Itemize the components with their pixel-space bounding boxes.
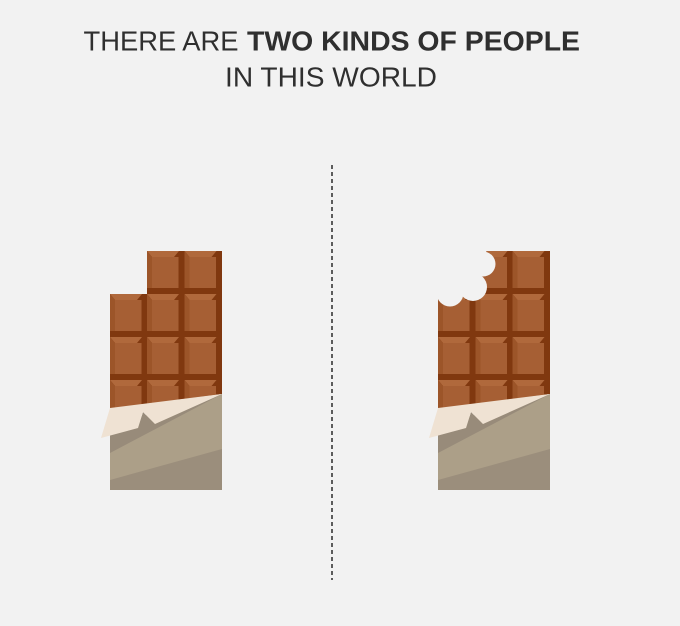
wrapper xyxy=(101,394,222,490)
bite mark xyxy=(430,245,496,306)
right chocolate bar: bitten xyxy=(429,245,550,490)
title: IN THIS WORLD xyxy=(225,62,437,92)
title: THERE ARE xyxy=(84,26,238,56)
divider: dashed line xyxy=(331,165,333,580)
wrapper xyxy=(429,394,550,490)
left chocolate bar: broken neatly xyxy=(101,251,222,490)
title xyxy=(84,26,580,92)
title: TWO KINDS OF PEOPLE xyxy=(247,26,580,56)
chocolate squares xyxy=(110,251,222,423)
chocolate squares xyxy=(438,251,550,423)
